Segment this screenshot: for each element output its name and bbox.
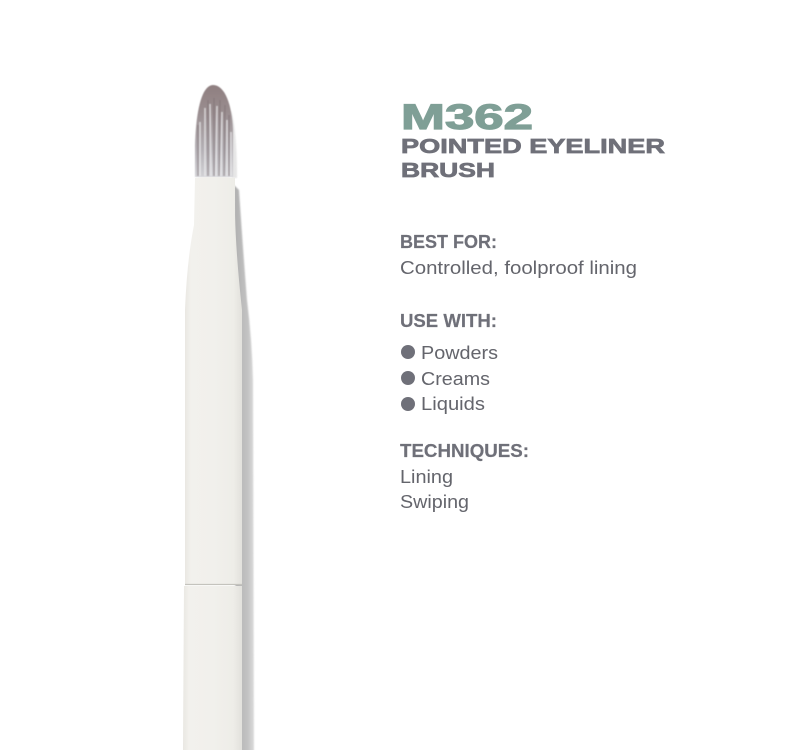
heading: BEST FOR:	[400, 231, 497, 252]
upper handle	[185, 177, 242, 584]
bristles	[195, 85, 233, 177]
product name: POINTED EYELINER	[401, 136, 666, 158]
handle joint line	[185, 584, 242, 586]
brush cast shadow	[231, 110, 254, 750]
brush	[183, 85, 254, 750]
list item: liquids: Liquids	[421, 393, 485, 414]
section: techniques	[400, 440, 529, 512]
heading: USE WITH:	[400, 310, 497, 331]
technique: swiping: Swiping	[400, 491, 469, 512]
technique: lining: Lining	[400, 466, 453, 487]
product code: M362	[401, 98, 533, 137]
list item: powders: Powders	[421, 342, 498, 363]
section: best for	[400, 231, 637, 278]
heading: TECHNIQUES:	[400, 440, 529, 461]
section: use with	[400, 310, 498, 414]
lower handle	[183, 586, 242, 750]
list item: creams: Creams	[421, 368, 490, 389]
product name line two: BRUSH	[401, 160, 495, 182]
title block	[401, 98, 666, 182]
description: Controlled, foolproof lining	[400, 257, 637, 278]
